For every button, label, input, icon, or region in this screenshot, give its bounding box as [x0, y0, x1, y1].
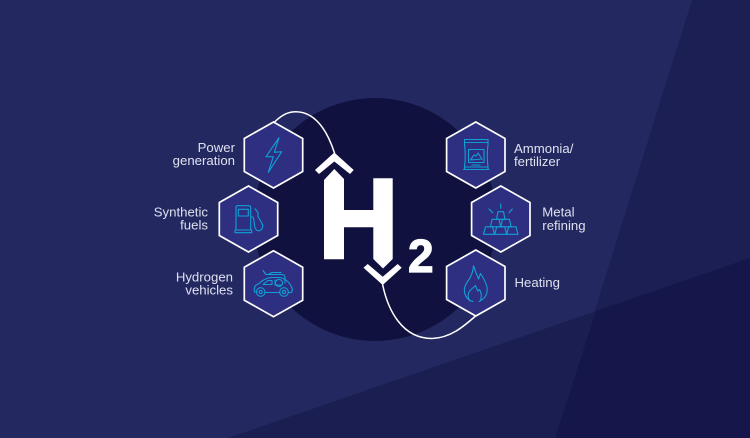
- letter H with arrows: [324, 169, 393, 268]
- item: synthetic fuels: [154, 186, 278, 252]
- hexagon: [447, 122, 505, 188]
- central dark circle: [254, 98, 496, 341]
- connector: power generation to H2: [274, 112, 334, 153]
- item: hydrogen vehicles: [176, 251, 303, 317]
- hexagon: [244, 122, 303, 188]
- label: Ammonia/: [514, 141, 574, 156]
- icon: fuel pump: [235, 206, 263, 233]
- item: metal refining: [472, 186, 586, 252]
- icon: car: [254, 270, 292, 296]
- label: Power: [198, 140, 236, 155]
- label: generation: [173, 153, 235, 168]
- hexagon: [219, 186, 278, 252]
- label: vehicles: [185, 282, 233, 297]
- subscript 2: 2: [408, 230, 434, 282]
- icon: fertilizer bag: [464, 140, 489, 170]
- label: refining: [542, 218, 586, 233]
- label: fertilizer: [514, 154, 561, 169]
- icon: gold bars: [484, 204, 518, 234]
- connector: H2 to heating: [383, 285, 475, 338]
- hexagon: [447, 250, 505, 316]
- icon: lightning bolt: [266, 138, 282, 172]
- hexagon: [472, 186, 530, 252]
- label: Metal: [542, 205, 575, 220]
- up chevron: [315, 152, 354, 174]
- label: Hydrogen: [176, 270, 233, 285]
- H2 symbol: [315, 152, 434, 285]
- item: ammonia fertilizer: [447, 122, 574, 188]
- item: power generation: [173, 122, 303, 188]
- label: Heating: [514, 275, 560, 290]
- down chevron: [364, 264, 402, 285]
- label: fuels: [180, 217, 208, 232]
- item: heating: [447, 250, 560, 316]
- hexagon: [244, 251, 303, 317]
- label: Synthetic: [154, 205, 208, 220]
- icon: flame: [464, 266, 487, 302]
